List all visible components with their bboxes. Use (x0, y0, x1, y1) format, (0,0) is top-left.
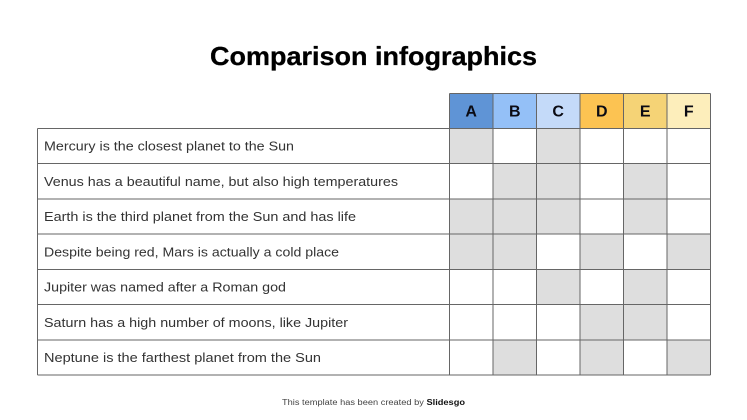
header row: columns A to F: A (465, 104, 477, 120)
row labels: Saturn has a high number of moons, like Jupiter (44, 315, 349, 330)
row labels: Jupiter was named after a Roman god (44, 280, 286, 294)
row labels (44, 138, 399, 365)
header row: columns A to F (450, 94, 710, 128)
comparison table (38, 94, 710, 375)
header row: columns A to F: E (640, 104, 651, 120)
header row: columns A to F: D (596, 104, 608, 120)
shaded comparison cells (450, 128, 710, 375)
title: Comparison infographics (210, 41, 537, 71)
row labels: Earth is the third planet from the Sun and has life (44, 209, 356, 224)
row labels: Venus has a beautiful name, but also high temperatures (44, 174, 399, 189)
header row: columns A to F: C (552, 104, 564, 120)
header row: columns A to F: F (684, 104, 694, 120)
footer credit: This template has been created by Slidesgo (282, 398, 465, 407)
row labels: Neptune is the farthest planet from the Sun (44, 350, 321, 365)
row labels: Mercury is the closest planet to the Sun (44, 138, 294, 154)
row labels: Despite being red, Mars is actually a cold place (44, 244, 339, 260)
header row: columns A to F: B (509, 104, 521, 120)
